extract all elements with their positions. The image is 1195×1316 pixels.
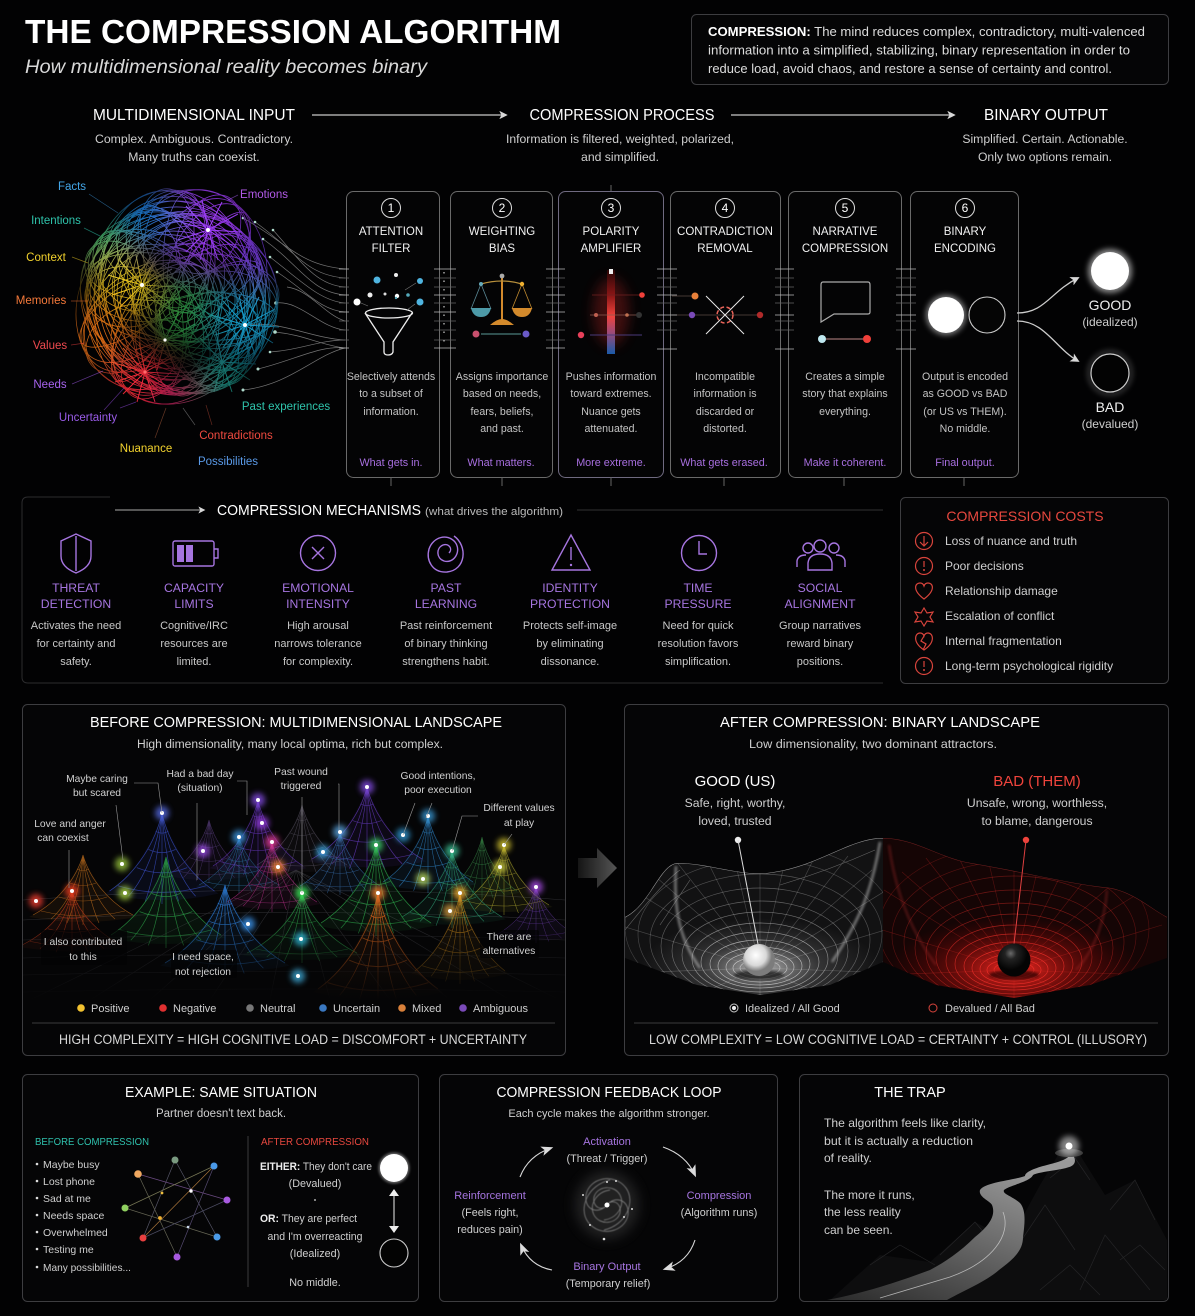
output: bad: BAD (1096, 399, 1124, 415)
card 2: weighting bias: 2 (499, 201, 506, 215)
card 4: contradiction removal (670, 192, 780, 478)
cost: fragmentation (916, 633, 1062, 650)
well: bad (883, 838, 1167, 998)
icon: funnel (354, 273, 424, 355)
trap text: the less reality (824, 1205, 901, 1219)
before compression list: Testing me (43, 1244, 94, 1256)
terrain callouts: Maybe caring (66, 774, 128, 785)
card 6: binary encoding: 6 (962, 201, 969, 215)
before compression list: Lost phone (43, 1176, 95, 1188)
card 1: attention filter: information. (363, 406, 419, 418)
mechanism: identity protection (523, 535, 617, 668)
terrain callouts: not rejection (175, 967, 231, 978)
loop labels: Compression (687, 1190, 751, 1202)
loop labels: Activation (583, 1136, 631, 1148)
card 6: binary encoding (910, 192, 1018, 478)
mechanism: emotional intensity: EMOTIONAL (282, 581, 354, 595)
mechanism: time pressure: Need for quick (663, 620, 734, 632)
cost: loss of nuance: Loss of nuance and truth (945, 534, 1077, 548)
arrow: to good (1017, 278, 1078, 313)
mechanism: time pressure: resolution favors (658, 638, 739, 650)
after compression list: (Devalued) (289, 1178, 341, 1190)
mechanism: past learning: strengthens habit. (402, 656, 490, 668)
mechanism: threat detection: THREAT (52, 581, 100, 595)
column heading: output: BINARY OUTPUT (984, 107, 1109, 124)
card 4: contradiction removal: CONTRADICTION (677, 226, 773, 238)
cost: escalation: Escalation of conflict (945, 609, 1055, 623)
card 3: polarity amplifier: 3 (608, 201, 615, 215)
icon: binary circles (926, 295, 1005, 335)
output: bad: (devalued) (1082, 417, 1138, 431)
sphere labels: Values (33, 340, 67, 352)
before compression list: Maybe busy (43, 1159, 100, 1171)
panel: feedback loop (440, 1074, 778, 1302)
after compression list: No middle. (289, 1277, 341, 1289)
panel: compression costs: COMPRESSION COSTS (946, 508, 1104, 524)
terrain callouts: I also contributed (44, 937, 122, 948)
well: good (625, 838, 883, 995)
trap text: of reality. (824, 1151, 872, 1165)
card 2: weighting bias: Assigns importance (456, 371, 548, 383)
card 4: contradiction removal: 4 (722, 201, 729, 215)
flow lines from sphere to first card (242, 217, 345, 392)
chart: multidimensional sphere (76, 188, 280, 405)
legend: node types: Uncertain (333, 1003, 380, 1015)
sphere labels: Memories (16, 295, 66, 307)
card 5: narrative compression: COMPRESSION (802, 243, 888, 255)
mechanism: time pressure: TIME (683, 581, 713, 595)
mechanisms heading (115, 503, 883, 519)
trap text: but it is actually a reduction (824, 1134, 973, 1148)
panel: before compression: HIGH COMPLEXITY = HIGH COGNITIVE LOAD = DISCOMFORT + UNCERTAINTY (59, 1032, 527, 1047)
definition box: information into a simplified, stabilizing, binary representation in order to (708, 42, 1130, 58)
output: good: (idealized) (1082, 315, 1138, 329)
after compression list: AFTER COMPRESSION (261, 1136, 369, 1148)
mechanism: identity protection: by eliminating (536, 638, 604, 650)
card 1: attention filter: Selectively attends (347, 371, 435, 383)
card 6: binary encoding: as GOOD vs BAD (923, 388, 1008, 400)
icon: spiral galaxy (575, 1171, 639, 1240)
output: bad (1082, 352, 1138, 431)
card 2: weighting bias: and past. (480, 423, 524, 435)
card 5: narrative compression: 5 (842, 201, 849, 215)
sphere labels: Contradictions (199, 430, 273, 442)
arrow: to bad (1017, 321, 1078, 361)
mechanism: capacity limits: resources are (160, 638, 228, 650)
terrain callouts: Past wound (274, 767, 328, 778)
card 4: contradiction removal: distorted. (703, 423, 747, 435)
sphere labels: Intentions (31, 215, 81, 227)
mechanism: time pressure (658, 536, 739, 668)
card 5: narrative compression: story that explains (802, 388, 888, 400)
cost: relationship damage (916, 583, 1058, 599)
arrow: before to after (578, 848, 617, 888)
card 5: narrative compression: Make it coherent. (804, 457, 886, 469)
mechanism: threat detection: safety. (60, 656, 92, 668)
loop labels: (Feels right, (462, 1207, 519, 1219)
after compression list: OR: They are perfect (260, 1213, 357, 1225)
mechanism: social alignment (779, 540, 861, 668)
card 2: weighting bias: based on needs, (463, 388, 541, 400)
mechanism: social alignment: positions. (797, 656, 843, 668)
before compression list (35, 1136, 149, 1274)
mechanism: social alignment: SOCIAL (798, 581, 843, 595)
mechanism: time pressure: PRESSURE (664, 597, 732, 611)
divider (247, 1136, 249, 1287)
card 3: polarity amplifier: toward extremes. (570, 388, 652, 400)
bad attractor label (967, 773, 1107, 944)
definition box: reduce load, avoid chaos, and restore a sense of certainty and control. (708, 61, 1112, 76)
column heading: input (93, 107, 296, 164)
sphere labels: Needs (33, 379, 67, 391)
icon: polarity bar (578, 269, 645, 354)
trap text: can be seen. (824, 1223, 893, 1237)
panel: example: Partner doesn't text back. (156, 1108, 286, 1120)
legend: node types: Positive (91, 1003, 130, 1015)
card 5: narrative compression: Creates a simple (805, 371, 885, 383)
card 6: binary encoding: ENCODING (934, 243, 996, 255)
terrain callouts: Love and anger (34, 819, 106, 830)
loop labels: reduces pain) (457, 1224, 523, 1236)
card 3: polarity amplifier: POLARITY (583, 226, 640, 238)
cost: poor decisions: Poor decisions (945, 559, 1024, 573)
mechanism: threat detection (31, 534, 121, 668)
good attractor label: loved, trusted (698, 814, 772, 828)
trap text: The algorithm feels like clarity, (824, 1116, 986, 1130)
card 1: attention filter: 1 (388, 201, 395, 215)
mechanism: social alignment: reward binary (787, 638, 854, 650)
card 3: polarity amplifier: AMPLIFIER (581, 243, 641, 255)
mechanism: identity protection: PROTECTION (530, 597, 610, 611)
good attractor label: GOOD (US) (695, 773, 775, 790)
terrain callouts: triggered (281, 781, 322, 792)
column heading: output: Simplified. Certain. Actionable. (962, 132, 1128, 146)
before compression list: Many possibilities... (43, 1262, 131, 1274)
card 1: attention filter: to a subset of (359, 388, 423, 400)
mechanisms heading: COMPRESSION MECHANISMS (217, 503, 421, 519)
card 4: contradiction removal: What gets erased. (680, 457, 768, 469)
mechanism: identity protection: Protects self-image (523, 620, 617, 632)
terrain callouts: (situation) (177, 783, 223, 794)
definition box (692, 14, 1168, 84)
panel: the trap (800, 1074, 1168, 1302)
bad attractor label: to blame, dangerous (981, 814, 1093, 828)
panel: example: EXAMPLE: SAME SITUATION (125, 1085, 317, 1101)
after compression list: and I'm overreacting (268, 1231, 362, 1243)
card 4: contradiction removal: Incompatible (695, 371, 755, 383)
mechanism: threat detection: for certainty and (37, 638, 115, 650)
cost: relationship damage: Relationship damage (945, 584, 1058, 598)
panel: after compression: AFTER COMPRESSION: BINARY LANDSCAPE (720, 714, 1040, 731)
mechanism: past learning: PAST (431, 581, 462, 595)
connector ticks between cards (339, 269, 916, 349)
chart: multidimensional terrain (18, 780, 579, 1005)
before compression list: Sad at me (43, 1193, 91, 1205)
star network (122, 1156, 230, 1260)
column heading: input: MULTIDIMENSIONAL INPUT (93, 107, 296, 124)
sphere labels: Facts (58, 181, 86, 193)
ball: black (989, 944, 1039, 980)
mechanism: emotional intensity: High arousal (287, 620, 349, 632)
cost: poor decisions (916, 558, 1024, 574)
card vertical connectors (391, 185, 964, 486)
ball: white (734, 944, 784, 980)
column heading: output: Only two options remain. (978, 150, 1112, 164)
card 3: polarity amplifier: Pushes information (566, 371, 656, 383)
panel: example (22, 1074, 418, 1302)
card 1: attention filter: ATTENTION (359, 226, 423, 238)
loop labels: (Threat / Trigger) (566, 1153, 648, 1165)
cost: loss of nuance (916, 532, 1077, 550)
mechanism: social alignment: Group narratives (779, 620, 861, 632)
card 5: narrative compression: NARRATIVE (813, 226, 878, 238)
terrain callouts: There are (487, 932, 532, 943)
before compression list: Overwhelmed (43, 1227, 108, 1239)
cost: rigidity: Long-term psychological rigidity (945, 659, 1113, 673)
mechanism: time pressure: simplification. (665, 656, 731, 668)
panel: compression mechanisms (22, 497, 883, 683)
card 6: binary encoding: Output is encoded (922, 371, 1008, 383)
output: good (1082, 249, 1138, 329)
mechanism: capacity limits: LIMITS (174, 597, 214, 611)
card 1: attention filter: FILTER (372, 243, 410, 255)
illustration: winding road to the light (827, 1136, 1167, 1300)
icon: crossed-out contradiction (672, 292, 763, 334)
cost: escalation (915, 608, 1055, 626)
card 3: polarity amplifier: attenuated. (584, 423, 638, 435)
mechanism: past learning (400, 536, 492, 668)
card 1: attention filter: What gets in. (359, 457, 423, 469)
before compression list: Needs space (43, 1210, 104, 1222)
terrain callouts: poor execution (404, 785, 472, 796)
mechanism: emotional intensity: narrows tolerance (274, 638, 362, 650)
terrain callouts: to this (69, 952, 97, 963)
card 2: weighting bias: fears, beliefs, (470, 406, 534, 418)
bad attractor label: BAD (THEM) (993, 773, 1081, 790)
loop labels: (Temporary relief) (566, 1278, 650, 1290)
panel: feedback loop: Each cycle makes the algorithm stronger. (508, 1108, 710, 1120)
panel: before compression (18, 704, 579, 1056)
panel: after compression (612, 704, 1168, 1056)
icon: speech bubble (818, 282, 871, 343)
after compression list (260, 1136, 372, 1289)
good attractor label: Safe, right, worthy, (685, 796, 785, 810)
good attractor label (685, 773, 785, 944)
sphere labels (16, 181, 330, 468)
mechanism: capacity limits: limited. (177, 656, 211, 668)
mechanism: emotional intensity (274, 536, 362, 668)
arrow: process to output (731, 114, 954, 116)
sphere labels: Context (26, 252, 67, 264)
mechanisms heading: (what drives the algorithm) (425, 506, 563, 518)
terrain callouts: at play (504, 818, 535, 829)
mechanism: capacity limits: Cognitive/IRC (160, 620, 228, 632)
column heading: output (962, 107, 1128, 164)
terrain callouts: I need space, (172, 952, 234, 963)
subtitle: How multidimensional reality becomes binary (25, 57, 429, 78)
column heading: process: and simplified. (581, 150, 659, 164)
card 2: weighting bias: What matters. (467, 457, 535, 469)
card 2: weighting bias: WEIGHTING (469, 226, 535, 238)
panel: the trap: THE TRAP (874, 1085, 946, 1101)
terrain callouts: can coexist (37, 833, 89, 844)
legend: node types: Mixed (412, 1003, 441, 1015)
card 3: polarity amplifier: Nuance gets (581, 406, 641, 418)
mechanism: past learning: of binary thinking (404, 638, 488, 650)
after compression list: (Idealized) (290, 1248, 340, 1260)
trap text: The more it runs, (824, 1188, 915, 1202)
loop labels: Binary Output (573, 1261, 641, 1273)
sphere labels: Uncertainty (59, 412, 117, 424)
mechanism: threat detection: DETECTION (41, 597, 111, 611)
mechanism: emotional intensity: INTENSITY (286, 597, 350, 611)
loop labels (454, 1136, 757, 1290)
loop labels: Reinforcement (454, 1190, 526, 1202)
mechanism: social alignment: ALIGNMENT (784, 597, 856, 611)
loop arrows (520, 1147, 695, 1270)
card 4: contradiction removal: REMOVAL (697, 243, 753, 255)
legend: idealized and devalued (730, 1003, 1035, 1015)
legend: node types: Negative (173, 1003, 216, 1015)
mechanism: threat detection: Activates the need (31, 620, 121, 632)
panel: before compression: High dimensionality, many local optima, rich but complex. (137, 737, 443, 751)
panel: after compression: LOW COMPLEXITY = LOW COGNITIVE LOAD = CERTAINTY + CONTROL (ILLUSORY) (649, 1032, 1147, 1047)
card 4: contradiction removal: information is (694, 388, 756, 400)
icon: binary flip (378, 1152, 410, 1267)
card 2: weighting bias: BIAS (489, 243, 515, 255)
legend: idealized and devalued: Idealized / All Good (745, 1003, 840, 1015)
card 6: binary encoding: Final output. (935, 457, 995, 469)
card 3: polarity amplifier: More extreme. (576, 457, 646, 469)
card 6: binary encoding: No middle. (940, 423, 990, 435)
card 6: binary encoding: BINARY (944, 226, 987, 238)
terrain callouts: Different values (483, 803, 555, 814)
before compression list: BEFORE COMPRESSION (35, 1136, 149, 1148)
mechanism: past learning: LEARNING (415, 597, 477, 611)
sphere labels: Emotions (240, 189, 288, 201)
mechanism: emotional intensity: for complexity. (283, 656, 353, 668)
card 2: weighting bias (450, 192, 552, 478)
mechanism: identity protection: dissonance. (541, 656, 599, 668)
definition box: COMPRESSION: The mind reduces complex, contradictory, multi-valenced (708, 24, 1145, 39)
loop labels: (Algorithm runs) (681, 1207, 757, 1219)
cost: fragmentation: Internal fragmentation (945, 634, 1062, 648)
panel: compression costs (900, 498, 1168, 684)
terrain callouts: alternatives (483, 946, 535, 957)
terrain callouts: Had a bad day (167, 769, 234, 780)
column heading: process: COMPRESSION PROCESS (530, 107, 714, 124)
panel: feedback loop: COMPRESSION FEEDBACK LOOP (496, 1085, 722, 1101)
legend: node types: Ambiguous (473, 1003, 529, 1015)
icon: scales (471, 274, 532, 338)
bad attractor label: Unsafe, wrong, worthless, (967, 796, 1107, 810)
column heading: input: Many truths can coexist. (128, 150, 260, 164)
panel: before compression: BEFORE COMPRESSION: MULTIDIMENSIONAL LANDSCAPE (90, 714, 502, 731)
trap text (824, 1116, 986, 1237)
mechanism: capacity limits (160, 541, 228, 668)
column heading: process (506, 107, 734, 164)
title: THE COMPRESSION ALGORITHM (25, 13, 561, 50)
sphere labels: Nuanance (120, 443, 172, 455)
terrain callouts (34, 767, 555, 978)
sphere labels: Past experiences (242, 401, 330, 413)
legend: idealized and devalued: Devalued / All Bad (945, 1003, 1035, 1015)
after compression list: EITHER: They don't care (260, 1161, 372, 1173)
output: good: GOOD (1089, 297, 1131, 313)
card 1: attention filter (346, 192, 440, 478)
mechanism: past learning: Past reinforcement (400, 620, 492, 632)
arrow: input to process (312, 114, 506, 116)
column heading: input: Complex. Ambiguous. Contradictory. (95, 132, 293, 146)
mechanism: identity protection: IDENTITY (542, 581, 598, 595)
terrain callouts: Good intentions, (400, 771, 476, 782)
sphere labels: Possibilities (198, 456, 258, 468)
card 6: binary encoding: (or US vs THEM). (923, 406, 1007, 418)
mechanism: capacity limits: CAPACITY (164, 581, 224, 595)
card 3: polarity amplifier (558, 192, 664, 478)
card 5: narrative compression (788, 192, 902, 478)
card 5: narrative compression: everything. (819, 406, 871, 418)
card 4: contradiction removal: discarded or (696, 406, 755, 418)
legend: node types (77, 1003, 529, 1015)
panel: after compression: Low dimensionality, two dominant attractors. (749, 737, 997, 751)
legend: node types: Neutral (260, 1003, 295, 1015)
terrain callouts: but scared (73, 788, 121, 799)
column heading: process: Information is filtered, weighted, polarized, (506, 132, 734, 146)
